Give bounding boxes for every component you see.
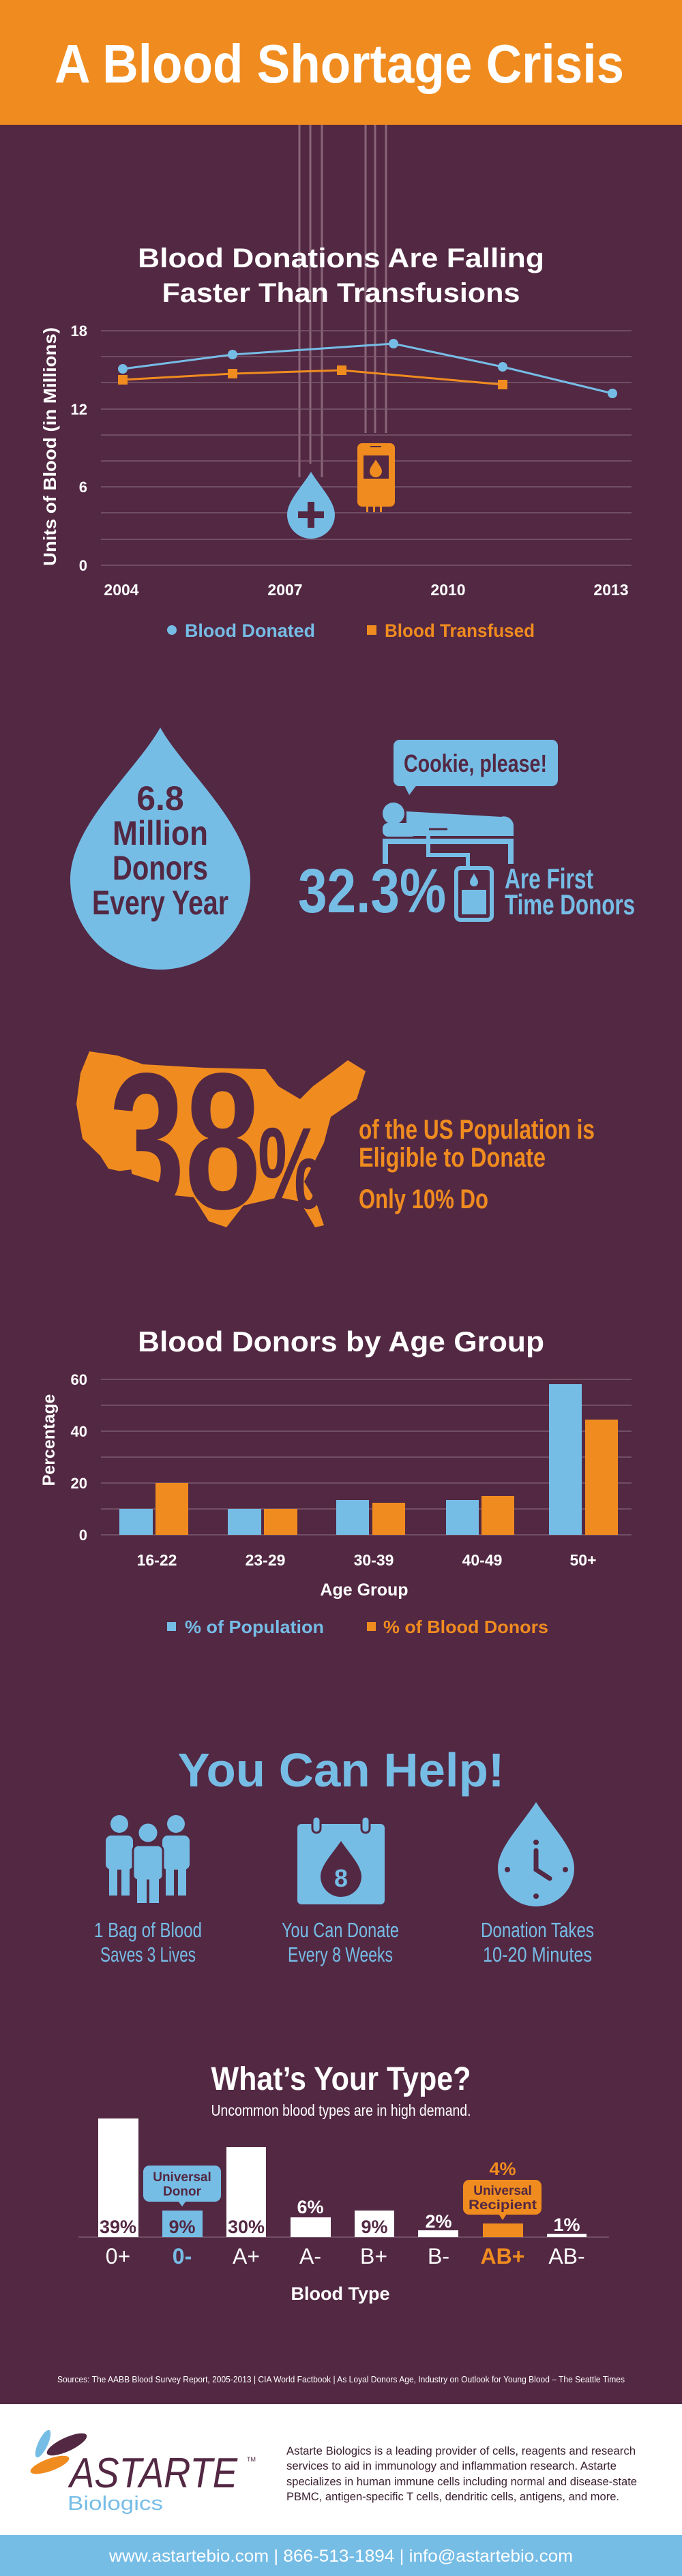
- icon: blood bag: [357, 443, 395, 512]
- logo: astarte biologics: ASTARTE: [67, 2450, 238, 2497]
- bar chart: donors by age group: 16-22: [137, 1551, 177, 1569]
- speech bubble: cookie please: Cookie, please!: [404, 749, 547, 777]
- callout: universal recipient: Recipient: [469, 2198, 537, 2213]
- icon: blood drop with cross: [287, 472, 335, 539]
- legend: line chart: Blood Donated: [185, 620, 315, 641]
- company description: specializes in human immune cells including normal and disease-state: [286, 2475, 637, 2488]
- heading: blood donors by age group: Blood Donors by Age Group: [138, 1326, 544, 1358]
- bar chart: donors by age group: 40: [71, 1423, 87, 1440]
- captions: you can help: You Can Donate: [282, 1918, 399, 1942]
- footer: company panel: [0, 2404, 682, 2535]
- US map with 38%: 38: [109, 1033, 261, 1250]
- bar chart: blood types: 39%: [100, 2217, 136, 2237]
- stat: 6.8 million donors drop: [70, 728, 250, 970]
- footer: contact bar: www.astartebio.com | 866-513-1894 | info@astartebio.com: [108, 2547, 573, 2566]
- callout: universal donor: [143, 2166, 221, 2206]
- x axis labels: 2013: [593, 581, 629, 599]
- stat: 32.3% first time donors: [298, 856, 635, 926]
- sources: Sources: The AABB Blood Survey Report, 2005-2013 | CIA World Factbook | As Loyal Donors Age, Industry on Outlook for Young Blood – The Seattle Times: [57, 2375, 625, 2384]
- legend: line chart: Blood Transfused: [385, 620, 535, 641]
- blood type labels: B+: [360, 2244, 387, 2268]
- bar chart: donors by age group: 60: [71, 1371, 87, 1388]
- bar chart: blood types: 30%: [228, 2217, 265, 2237]
- icon: donor lying on bed: [383, 803, 514, 867]
- blood type labels: A+: [233, 2244, 260, 2268]
- US map with 38%: %: [258, 1104, 323, 1233]
- bar chart: donors by age group: 23-29: [246, 1551, 285, 1569]
- company description: Astarte Biologics is a leading provider of cells, reagents and research: [286, 2444, 636, 2457]
- text: eligible to donate: of the US Population is: [359, 1115, 595, 1145]
- y axis labels: 12: [71, 401, 87, 418]
- blood type labels: 0+: [106, 2244, 130, 2268]
- x axis labels: 2004: [104, 581, 139, 599]
- title: A Blood Shortage Crisis: [55, 33, 624, 94]
- series: blood donated: [118, 339, 617, 398]
- bar chart: blood types: 9%: [168, 2217, 196, 2237]
- icon: clock drop: [498, 1802, 574, 1906]
- stat: 32.3% first time donors: 32.3%: [298, 856, 446, 926]
- legend: line chart: [167, 620, 535, 641]
- bar chart: donors by age group: 30-39: [354, 1551, 394, 1569]
- bar chart: blood types: [78, 2118, 609, 2304]
- callout: universal donor: Universal: [153, 2170, 211, 2185]
- icon: three people: [106, 1815, 190, 1903]
- logo: astarte biologics: TM: [247, 2456, 256, 2463]
- decorative hanging lines: [299, 125, 386, 477]
- logo: astarte biologics: [29, 2428, 256, 2515]
- captions: you can help: Saves 3 Lives: [100, 1943, 196, 1966]
- series: blood transfused: [118, 365, 507, 389]
- bar chart: donors by age group: Percentage: [40, 1394, 59, 1486]
- stat: 32.3% first time donors: Are First: [505, 863, 593, 895]
- company description: [286, 2444, 637, 2503]
- stat: 6.8 million donors drop: Every Year: [92, 884, 228, 922]
- company description: services to aid in immunology and inflammation research. Astarte: [286, 2459, 617, 2472]
- bar chart: blood types: 9%: [361, 2217, 388, 2237]
- captions: you can help: 10-20 Minutes: [483, 1943, 592, 1966]
- blood type labels: AB-: [548, 2244, 585, 2268]
- x axis labels: 2010: [430, 581, 466, 599]
- stat: 32.3% first time donors: Time Donors: [505, 888, 635, 920]
- bar chart: donors by age group: 50+: [569, 1551, 597, 1569]
- chart title: donations falling: [138, 243, 544, 308]
- captions: you can help: 1 Bag of Blood: [94, 1918, 202, 1942]
- captions: you can help: Every 8 Weeks: [288, 1943, 393, 1966]
- stat: 6.8 million donors drop: 6.8: [136, 779, 184, 818]
- bar chart: blood types: 1%: [553, 2215, 580, 2235]
- bar chart: blood types: Blood Type: [291, 2283, 390, 2304]
- blood type labels: [106, 2244, 585, 2268]
- blood type labels: AB+: [481, 2244, 524, 2268]
- line chart: blood donated vs transfused: [40, 323, 632, 599]
- y axis labels: 6: [79, 479, 87, 496]
- heading: what's your type: [211, 2061, 471, 2119]
- legend: age chart: [167, 1617, 548, 1637]
- logo: astarte biologics: Biologics: [68, 2493, 163, 2515]
- company description: PBMC, antigen-specific T cells, dendritic cells, antigens, and more.: [286, 2490, 619, 2503]
- icon: calendar with 8: 8: [334, 1864, 348, 1892]
- stat: 6.8 million donors drop: Donors: [113, 849, 208, 887]
- bar chart: donors by age group: [40, 1371, 632, 1600]
- blood type labels: A-: [299, 2244, 321, 2268]
- icon: small blood bag: [456, 868, 492, 920]
- callout: universal recipient: [463, 2180, 542, 2220]
- blood type labels: 0-: [173, 2244, 192, 2268]
- bar chart: donors by age group: 40-49: [462, 1551, 502, 1569]
- speech bubble: cookie please: [394, 740, 558, 795]
- bar chart: donors by age group: 20: [71, 1475, 87, 1492]
- text: eligible to donate: Eligible to Donate: [359, 1143, 546, 1173]
- text: eligible to donate: [359, 1115, 595, 1214]
- bar chart: blood types: 6%: [297, 2197, 324, 2217]
- footer: contact bar: [0, 2535, 682, 2576]
- header banner: [0, 0, 682, 125]
- callout: universal recipient: Universal: [473, 2184, 532, 2198]
- heading: what's your type: What’s Your Type?: [211, 2061, 471, 2097]
- heading: you can help: You Can Help!: [177, 1743, 505, 1797]
- bar chart: blood types: 2%: [425, 2211, 452, 2232]
- y axis labels: [71, 323, 87, 574]
- blood type labels: B-: [428, 2244, 449, 2268]
- icon: calendar with 8: [297, 1816, 385, 1904]
- subtitle: Uncommon blood types are in high demand.: [211, 2101, 471, 2119]
- chart title: donations falling: Faster Than Transfusions: [162, 278, 520, 308]
- chart title: donations falling: Blood Donations Are Falling: [138, 243, 544, 273]
- bar chart: donors by age group: 0: [79, 1527, 87, 1544]
- callout: universal donor: Donor: [163, 2185, 202, 2199]
- x axis labels: [104, 581, 629, 599]
- text: eligible to donate: Only 10% Do: [359, 1184, 488, 1214]
- stat: 6.8 million donors drop: Million: [113, 814, 208, 852]
- captions: you can help: [94, 1918, 594, 1966]
- legend: age chart: % of Population: [185, 1617, 324, 1637]
- captions: you can help: Donation Takes: [481, 1918, 594, 1942]
- legend: age chart: % of Blood Donors: [383, 1617, 548, 1637]
- y axis labels: 0: [79, 557, 87, 574]
- bar chart: donors by age group: Age Group: [320, 1581, 409, 1600]
- y axis labels: 18: [71, 323, 87, 340]
- x axis labels: 2007: [267, 581, 303, 599]
- bar chart: blood types: 4%: [489, 2159, 516, 2179]
- y axis title: Units of Blood (in Millions): [40, 327, 60, 566]
